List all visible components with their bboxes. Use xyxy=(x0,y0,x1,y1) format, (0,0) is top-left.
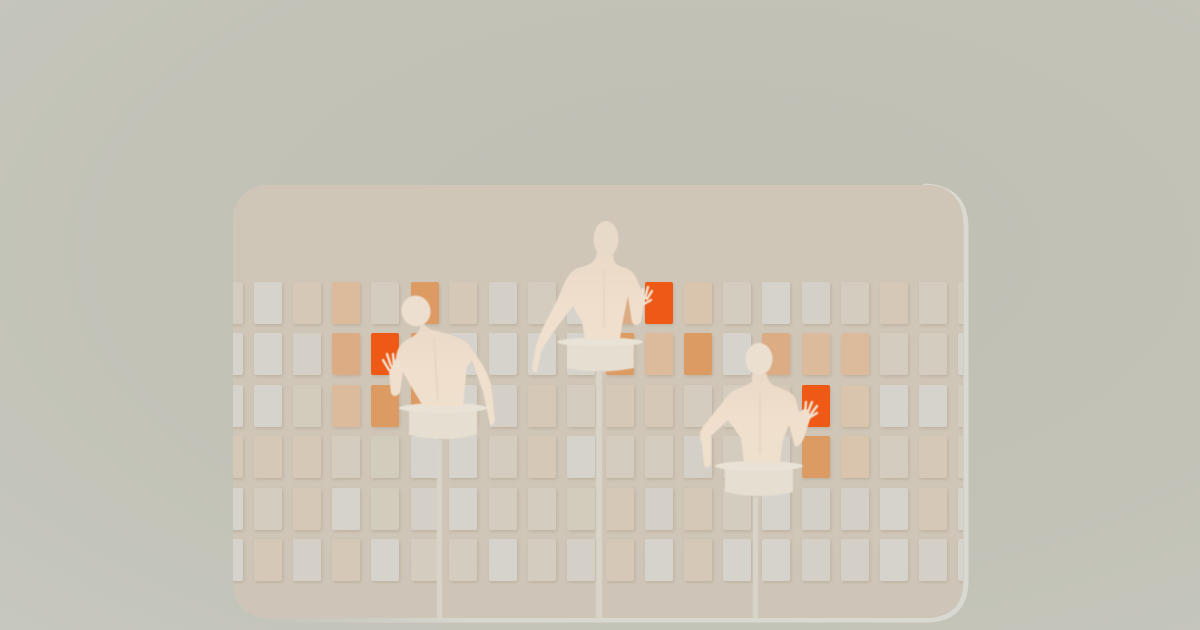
tile row 6 xyxy=(215,539,986,581)
figure: left torso on pedestal xyxy=(383,292,495,618)
tile row 1 xyxy=(215,282,986,324)
tile row 3 xyxy=(215,385,986,427)
figure: right torso on pedestal xyxy=(700,343,817,618)
tile row 4 xyxy=(215,436,986,478)
tile row 2 xyxy=(215,333,986,375)
figure: centre torso on pedestal xyxy=(532,221,652,618)
tile grid xyxy=(215,282,986,581)
panel: recessed tile board xyxy=(233,185,966,620)
illustration scene xyxy=(233,184,968,622)
tile row 5 xyxy=(215,488,986,530)
